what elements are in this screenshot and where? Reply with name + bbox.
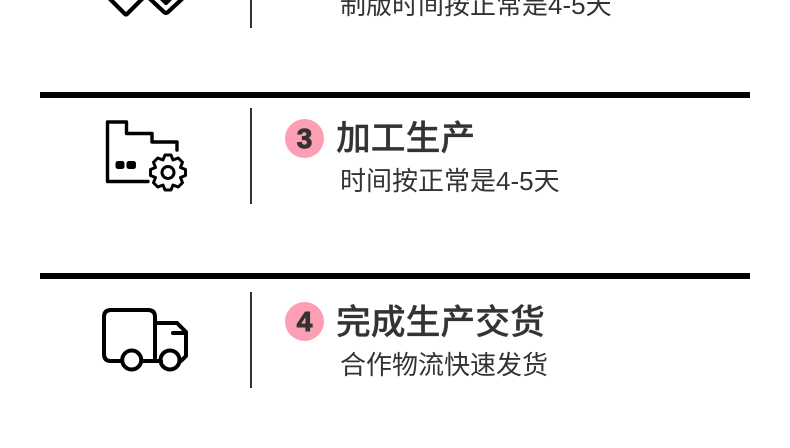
badge: number 3 [285,119,324,158]
divider: step 3 top bar [40,92,750,98]
icon: factory with gear [106,120,187,192]
divider: step 3 vertical rule [250,108,252,204]
heading: step 4: 完成生产交货 [336,303,545,342]
divider: step 2 vertical rule [250,0,252,28]
divider: step 4 top bar [40,273,750,279]
text: step 4 description: 合作物流快速发货 [340,350,548,380]
heading: step 3: 加工生产 [336,119,475,158]
divider: step 4 vertical rule [250,292,252,388]
icon: partial checkmarks from step 2 [108,0,184,17]
text: step 3 description: 时间按正常是4-5天 [340,166,560,196]
icon: delivery truck [102,308,188,372]
badge: number 4 [285,302,324,341]
badge: number 4: 4 [297,306,312,337]
badge: number 3: 3 [297,123,312,154]
